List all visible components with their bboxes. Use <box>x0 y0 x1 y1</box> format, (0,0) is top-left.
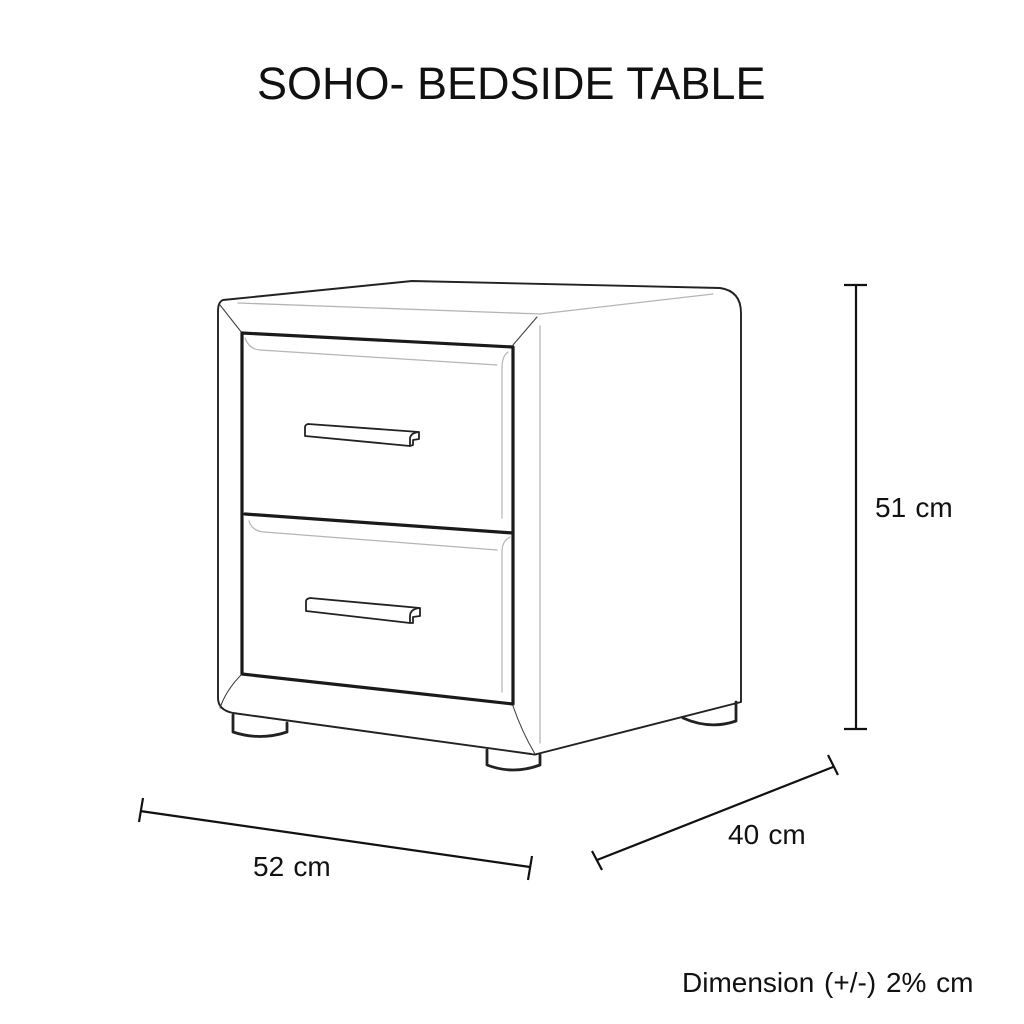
top drawer bevel <box>245 338 508 518</box>
bottom drawer bevel <box>249 521 510 692</box>
title: SOHO- BEDSIDE TABLE <box>257 58 765 109</box>
dimension: depth <box>592 755 838 870</box>
bottom drawer handle <box>306 598 420 623</box>
dimension: height <box>844 285 953 729</box>
foot: left <box>233 715 287 736</box>
top drawer handle <box>305 424 419 446</box>
drawer opening frame <box>242 333 513 704</box>
frame mitre lines <box>220 305 537 754</box>
top and side highlight lines <box>238 294 713 743</box>
dimension: width <box>139 798 532 882</box>
label: depth: 40 cm <box>728 819 806 850</box>
footnote: Dimension (+/-) 2% cm <box>682 967 974 998</box>
label: width: 52 cm <box>253 851 331 882</box>
drawer divider <box>245 514 513 533</box>
cabinet outline <box>218 281 741 754</box>
foot: right <box>683 702 736 725</box>
foot: middle <box>487 750 540 770</box>
label: height: 51 cm <box>875 492 953 523</box>
illustration: bedside table <box>218 281 741 770</box>
